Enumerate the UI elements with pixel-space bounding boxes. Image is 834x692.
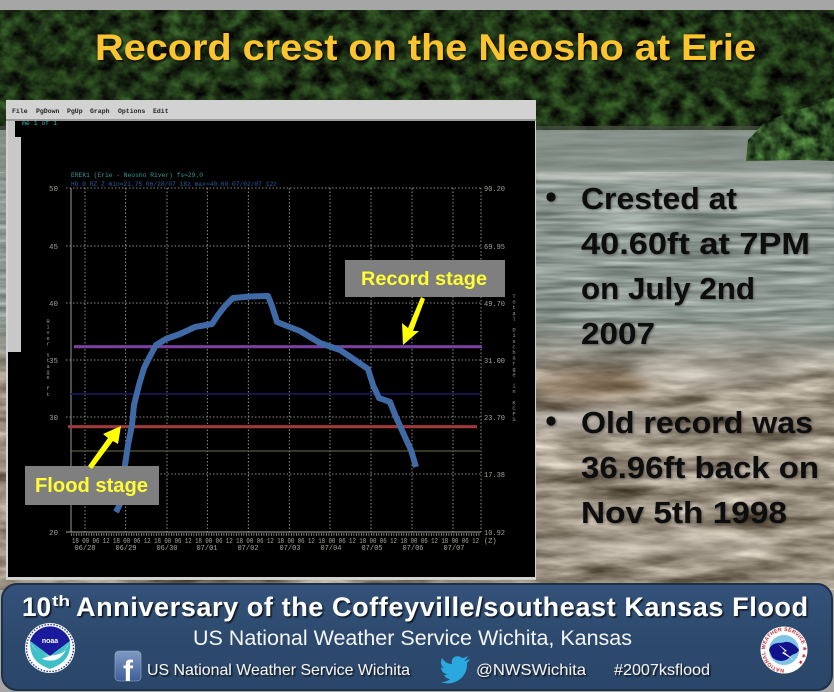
bullet: crest: on July 2nd [581,271,755,306]
x axis labels: 07/03 [279,545,301,553]
left axis labels: river stage: 30 [49,415,59,423]
social: facebook: f [123,655,134,688]
x axis labels: 07/05 [361,545,383,553]
menu bar: File [12,108,28,115]
stage lines [68,347,482,451]
arrow: to flood stage line [88,426,121,469]
bullet: old record [546,405,819,530]
footer banner [1,583,833,691]
hashtag: #2007ksflood [614,662,710,679]
bullet: old record: 36.96ft back on [581,450,819,485]
x axis labels: 07/04 [320,545,342,553]
callout: flood stage [25,426,159,505]
menu bar [12,108,169,115]
x axis labels: (Z) [484,538,497,546]
bullet: old record: Old record was [581,405,813,440]
icon: NOAA logo [25,623,75,673]
x axis labels: 06/30 [156,545,178,553]
river stage curve [116,296,416,512]
grid [66,188,481,532]
social: twitter bird [441,656,470,683]
icon: NOAA logo: noaa [42,638,58,645]
icon: National Weather Service logo: NATIONAL WEATHER SERVICE ★ ★ ★ [761,627,807,673]
right axis labels: discharge: 69.95 [484,244,505,252]
arrow: to record stage line [402,297,425,345]
x axis labels: 06/28 [74,545,96,553]
x axis labels: 07/01 [196,545,218,553]
bullet: crest: Crested at [581,181,737,216]
right axis title: Total Discharge in KCFS [510,293,518,422]
footer heading: Anniversary of the Coffeyville/southeast Kansas Flood [76,592,808,622]
x axis labels [72,538,497,553]
twitter handle: @NWSWichita [476,662,586,679]
menu bar: Graph [90,108,110,115]
menu bar: PgUp [67,108,83,115]
axes [66,188,481,534]
x axis labels: 07/06 [402,545,424,553]
callout: record stage: Record stage [361,269,487,290]
page indicator: me 1 of 1 [22,120,57,127]
x axis labels: 07/07 [443,545,465,553]
x axis labels: 18 00 06 12 18 00 06 12 18 00 06 12 18 00 06 12 18 00 06 12 18 00 06 12 18 00 06 12 18 00 06 12 18 00 06 12 18 00 06 12 [72,538,479,546]
left axis labels: river stage: 40 [49,301,59,309]
bullet list [546,181,819,530]
menu bar: Edit [153,108,169,115]
footer heading: 10 [22,592,51,622]
left axis labels: river stage: 20 [49,530,59,538]
right axis labels: discharge: 31.00 [484,358,505,366]
menu bar: PgDown [36,108,60,115]
footer subtitle: US National Weather Service Wichita, Kansas [193,627,632,650]
callout: flood stage: Flood stage [35,475,148,497]
left axis labels: river stage: 35 [49,358,59,366]
facebook name: US National Weather Service Wichita [147,662,410,679]
bullet: crest [546,181,810,351]
panel: hydrograph screenshot window [6,100,536,580]
left axis title: River stage ft [44,318,52,396]
right axis labels: discharge: 17.38 [484,472,505,480]
chart header: HG 0 RZ Z min=21.75 06/28/07 18z max=40.60 07/02/07 12z [71,181,277,188]
left axis labels: river stage [49,186,59,538]
right axis labels: discharge: 10.92 [484,530,505,538]
title: Record crest on the Neosho at Erie [95,27,756,68]
x axis labels: 06/29 [115,545,137,553]
chart header: EREK1 (Erie - Neosho River) fs=29.0 [71,172,203,179]
footer heading: th [52,593,70,610]
x axis labels: 07/02 [237,545,259,553]
bullet: crest: 2007 [581,316,655,351]
right axis labels: discharge: 49.70 [484,301,505,309]
bullet: crest: 40.60ft at 7PM [581,226,810,261]
chart header [71,172,277,188]
left axis labels: river stage: 45 [49,244,59,252]
menu bar: Options [118,108,145,115]
bullet: old record: Nov 5th 1998 [581,495,787,530]
left axis labels: river stage: 50 [49,186,59,194]
right axis labels: discharge: 23.70 [484,415,505,423]
right axis labels: discharge: 90.20 [484,186,505,194]
social: facebook [115,651,141,688]
callout: record stage [345,260,505,345]
right axis labels: discharge [484,186,505,538]
